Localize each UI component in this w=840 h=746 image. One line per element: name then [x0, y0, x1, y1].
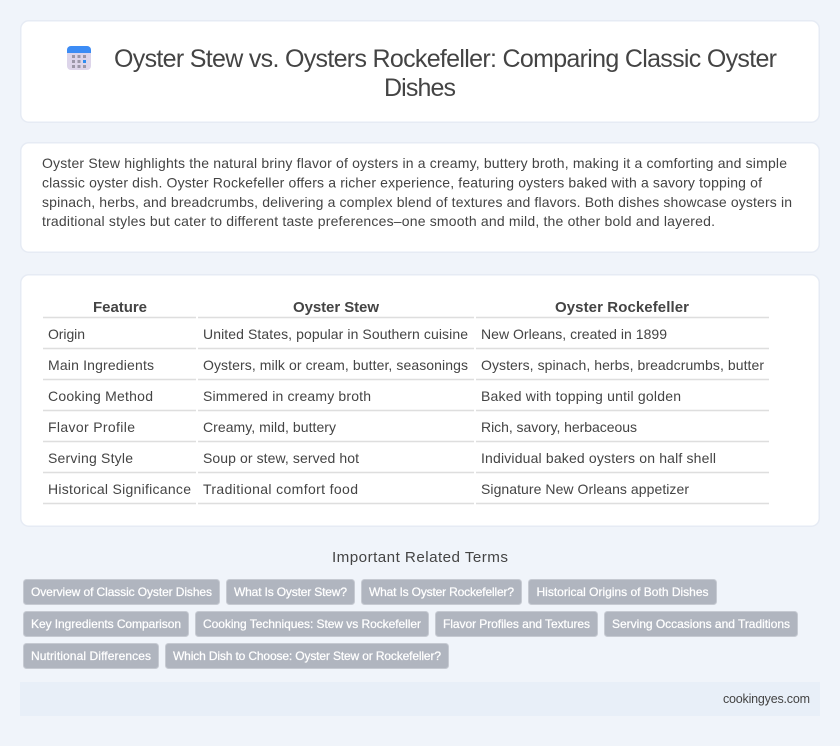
tag: [24, 580, 220, 604]
row: serving style: [48, 450, 716, 466]
row: main ingredients: [48, 357, 764, 373]
panel: summary: [21, 143, 819, 252]
panel: title header: [21, 21, 819, 122]
tag: Historical Origins of Both Dishes: [536, 585, 708, 599]
tag: Serving Occasions and Traditions: [612, 617, 790, 631]
row: historical significance: Historical Significance: [48, 481, 191, 497]
row: flavor profile: [48, 419, 637, 435]
footer: [20, 682, 820, 716]
table header: [93, 299, 689, 316]
summary text: Oyster Stew highlights the natural briny flavor of oysters in a creamy, buttery broth, making it a comforting and simple: [42, 155, 787, 171]
row: cooking method: Cooking Method: [48, 388, 153, 404]
row: origin: Origin: [48, 326, 85, 342]
table header: Oyster Rockefeller: [555, 299, 689, 316]
table header: Oyster Stew: [293, 299, 379, 316]
row: cooking method: [48, 388, 681, 404]
summary text: [42, 155, 792, 229]
icon: calendar: [67, 46, 91, 70]
tag: [528, 580, 716, 604]
panel: comparison table: [21, 275, 819, 526]
tag: Key Ingredients Comparison: [31, 617, 181, 631]
row: main ingredients: Oysters, spinach, herbs, breadcrumbs, butter: [481, 357, 764, 373]
tag: [24, 612, 188, 636]
tag: Nutritional Differences: [31, 649, 151, 663]
title: [114, 45, 777, 102]
row: cooking method: Baked with topping until golden: [481, 388, 681, 404]
tag: [436, 612, 598, 636]
row: flavor profile: Creamy, mild, buttery: [203, 419, 336, 435]
tag: What Is Oyster Stew?: [234, 585, 347, 599]
summary text: traditional styles but cater to different taste preferences–one smooth and mild, the other bold and layered.: [42, 213, 715, 229]
tag: Cooking Techniques: Stew vs Rockefeller: [203, 617, 421, 631]
tag: [196, 612, 428, 636]
title: Oyster Stew vs. Oysters Rockefeller: Comparing Classic Oyster: [114, 45, 777, 73]
tag: [604, 612, 798, 636]
row: flavor profile: Flavor Profile: [48, 419, 135, 435]
related term tags: [24, 580, 798, 668]
heading: related terms: Important Related Terms: [332, 549, 508, 566]
row: origin: United States, popular in Southern cuisine: [203, 326, 468, 342]
row: historical significance: Traditional comfort food: [203, 481, 358, 497]
row: origin: [48, 326, 667, 342]
summary text: classic oyster dish. Oyster Rockefeller offers a richer experience, featuring oysters baked with a savory topping of: [42, 174, 762, 190]
tag: Flavor Profiles and Textures: [443, 617, 590, 631]
row: historical significance: [48, 481, 689, 497]
row: historical significance: Signature New Orleans appetizer: [481, 481, 689, 497]
tag: Which Dish to Choose: Oyster Stew or Rockefeller?: [173, 649, 441, 663]
footer: cookingyes.com: [723, 692, 810, 706]
row: main ingredients: Main Ingredients: [48, 357, 154, 373]
title: Dishes: [384, 74, 456, 102]
tag: [226, 580, 354, 604]
tag: What Is Oyster Rockefeller?: [369, 585, 514, 599]
table header: Feature: [93, 299, 147, 316]
row: serving style: Serving Style: [48, 450, 133, 466]
row: serving style: Individual baked oysters on half shell: [481, 450, 716, 466]
row: serving style: Soup or stew, served hot: [203, 450, 359, 466]
tag: [362, 580, 522, 604]
row: main ingredients: Oysters, milk or cream, butter, seasonings: [203, 357, 468, 373]
row: cooking method: Simmered in creamy broth: [203, 388, 371, 404]
row: flavor profile: Rich, savory, herbaceous: [481, 419, 637, 435]
row: origin: New Orleans, created in 1899: [481, 326, 667, 342]
tag: [166, 644, 448, 668]
tag: [24, 644, 158, 668]
summary text: spinach, herbs, and breadcrumbs, delivering a complex blend of textures and flavors. Both dishes showcase oysters in: [42, 194, 792, 210]
tag: Overview of Classic Oyster Dishes: [31, 585, 212, 599]
